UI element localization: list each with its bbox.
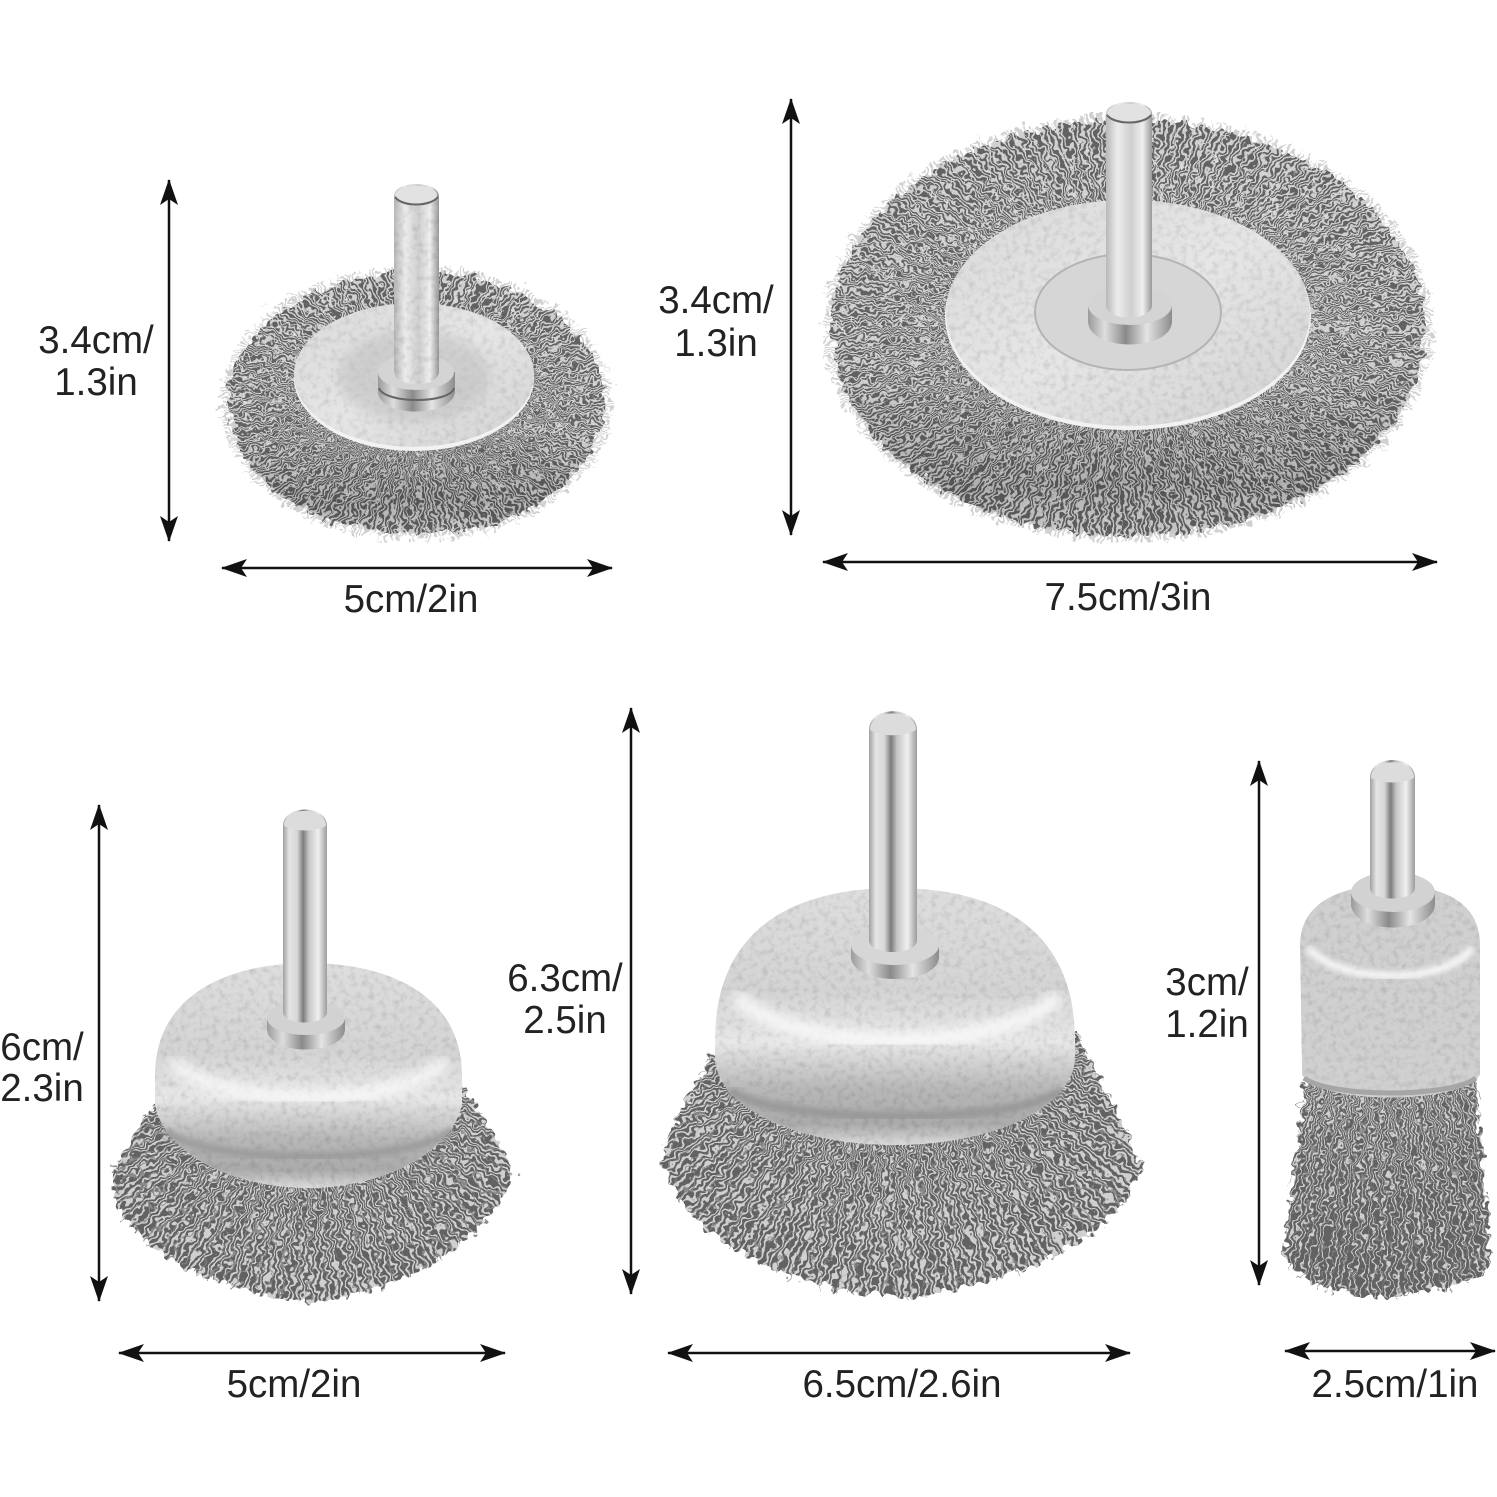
label: small wheel width: 5cm/2in bbox=[344, 578, 478, 621]
cup housing: left cup bbox=[155, 963, 462, 1188]
collar: small wheel bbox=[378, 354, 455, 412]
label: small wheel height: 3.4cm/ bbox=[38, 319, 154, 362]
label: end brush height: 3cm/ bbox=[1165, 961, 1249, 1004]
brush: large wheel bbox=[831, 102, 1425, 536]
label: middle cup height: 2.5in bbox=[523, 999, 607, 1042]
arrow: large wheel width bbox=[823, 561, 1437, 563]
label: large wheel height: 1.3in bbox=[674, 322, 758, 365]
cup housing: middle cup bbox=[715, 888, 1075, 1145]
label: large wheel height: 3.4cm/ bbox=[658, 279, 774, 322]
arrow: middle cup width bbox=[668, 1352, 1130, 1354]
shaft: small end brush bbox=[1370, 760, 1415, 898]
wires: small end brush bbox=[1281, 1080, 1494, 1300]
arrow: small wheel width bbox=[222, 567, 612, 569]
wires: middle cup bbox=[660, 1031, 1145, 1300]
arrow: end brush height bbox=[1258, 761, 1260, 1285]
label: large wheel width: 7.5cm/3in bbox=[1045, 576, 1211, 619]
arrow: left cup height bbox=[98, 805, 100, 1301]
label: end brush width: 2.5cm/1in bbox=[1312, 1363, 1478, 1406]
collar: left cup bbox=[267, 1001, 345, 1050]
arrow: left cup width bbox=[119, 1352, 505, 1354]
hub disc: small wheel bbox=[294, 303, 534, 451]
arrow: end brush width bbox=[1285, 1350, 1495, 1352]
brush: small wheel bbox=[228, 184, 604, 534]
arrow: middle cup height bbox=[630, 708, 632, 1294]
label: left cup width: 5cm/2in bbox=[227, 1363, 361, 1406]
wires: small wheel bbox=[228, 272, 604, 534]
collar: middle cup bbox=[851, 925, 939, 979]
label: middle cup height: 6.3cm/ bbox=[507, 957, 623, 1000]
label: middle cup width: 6.5cm/2.6in bbox=[802, 1363, 1002, 1406]
arrow: large wheel height bbox=[790, 99, 792, 535]
label: left cup height: 2.3in bbox=[0, 1067, 84, 1110]
arrow: small wheel height bbox=[168, 180, 170, 541]
shaft: large wheel bbox=[1106, 102, 1152, 318]
collar: small end brush bbox=[1351, 872, 1435, 928]
brush: small end brush bbox=[1281, 760, 1494, 1300]
label: small wheel height: 1.3in bbox=[54, 361, 138, 404]
label: end brush height: 1.2in bbox=[1165, 1003, 1249, 1046]
brush: middle cup bbox=[640, 711, 1170, 1310]
brush: left cup bbox=[100, 810, 530, 1310]
shaft: small wheel bbox=[394, 184, 439, 384]
shaft: left cup bbox=[283, 810, 327, 1022]
label: left cup height: 6cm/ bbox=[0, 1026, 84, 1069]
wires: large wheel bbox=[831, 120, 1425, 536]
cup housing: small end brush bbox=[1300, 885, 1480, 1098]
shaft: middle cup bbox=[869, 711, 917, 952]
hub disc: large wheel bbox=[945, 200, 1311, 430]
wires: left cup bbox=[109, 1086, 521, 1306]
collar: large wheel bbox=[1088, 285, 1172, 344]
